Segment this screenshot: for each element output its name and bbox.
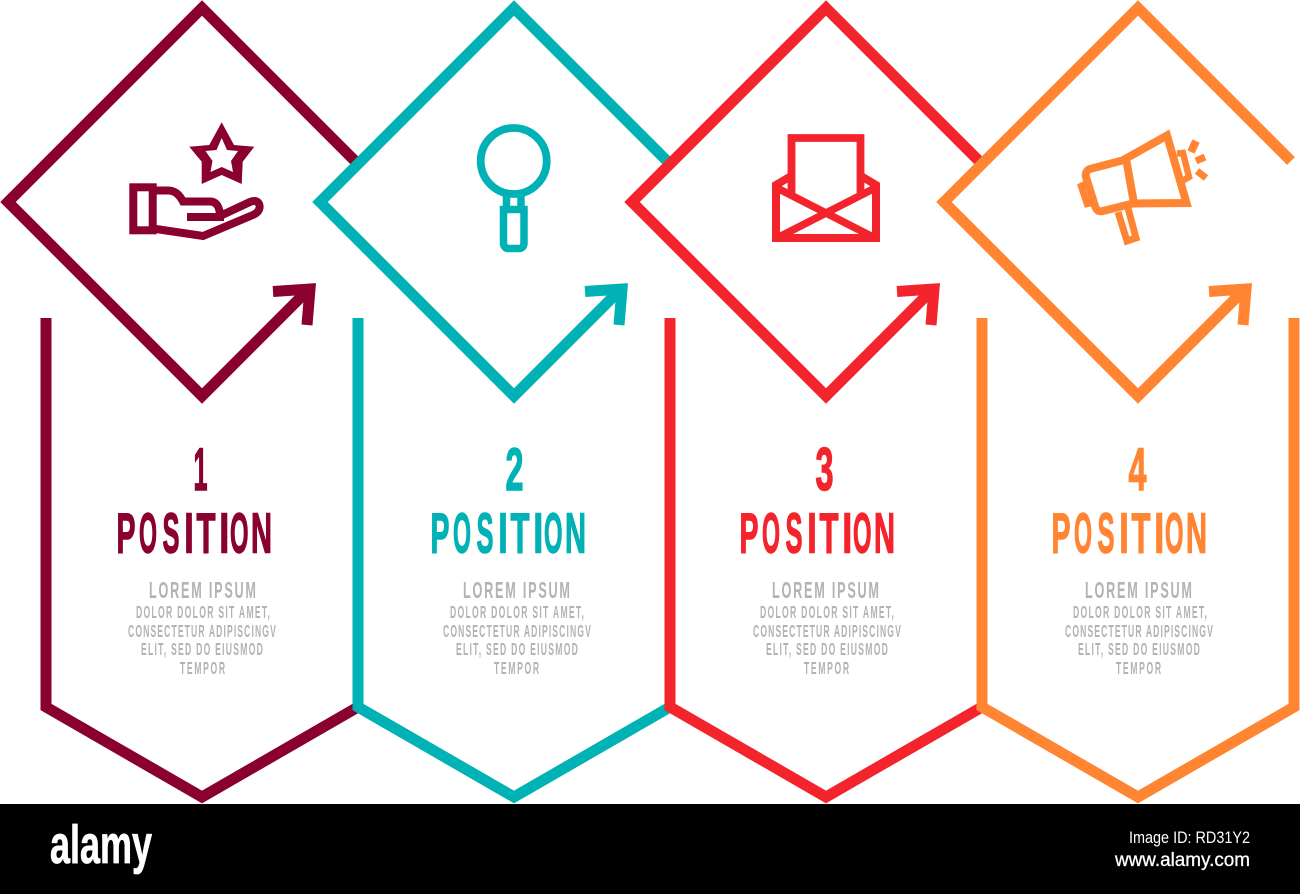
panel: position 2 <box>320 8 670 797</box>
diamond with arrow 3 <box>632 8 982 396</box>
heading: position 3: I <box>807 502 817 566</box>
heading: position 4: I <box>1119 502 1129 566</box>
footer logo: alamy <box>50 815 152 875</box>
panel: position 4 <box>944 8 1294 797</box>
image id: Image ID: RD31Y2 <box>1129 828 1250 847</box>
diamond with arrow 4 <box>944 8 1291 396</box>
heading: position 1: O <box>139 502 157 566</box>
heading: position 1: O <box>230 502 248 566</box>
panel: position 3 <box>632 8 982 797</box>
heading: position 1: S <box>162 502 180 566</box>
number 4: 4 <box>1128 436 1147 503</box>
heading: position 2: N <box>565 502 586 566</box>
text block 4: CONSECTETUR ADIPISCINGV <box>1065 620 1213 641</box>
heading: position 2: O <box>544 502 562 566</box>
icon: megaphone <box>1081 136 1206 241</box>
hexagon outline 1 <box>46 318 358 797</box>
diamond with arrow 1 <box>8 8 358 396</box>
hexagon outline 2 <box>358 318 670 797</box>
text block 4 <box>1065 577 1213 678</box>
heading: position 3: S <box>786 502 802 566</box>
text block 2: DOLOR DOLOR SIT AMET, <box>450 601 584 622</box>
text block 3: TEMPOR <box>804 657 849 678</box>
heading: position 4: O <box>1074 502 1092 566</box>
heading: position 3: P <box>740 502 758 566</box>
heading: position 1: I <box>219 502 229 566</box>
heading: position 1: N <box>251 502 272 566</box>
icon: hand with star <box>133 122 260 236</box>
heading: position 3: I <box>842 502 852 566</box>
heading: position 4: P <box>1052 502 1070 566</box>
heading: position 3: T <box>820 502 839 566</box>
heading: position 2: S <box>476 502 494 566</box>
heading: position 2: O <box>453 502 471 566</box>
heading: position 3: N <box>874 502 895 566</box>
number 2: 2 <box>506 436 524 503</box>
panel: position 1 <box>8 8 358 797</box>
text block 3: LOREM IPSUM <box>772 577 879 603</box>
heading: position 2: P <box>430 502 450 566</box>
heading: position 1: T <box>196 502 216 566</box>
panel: position 1: 1 <box>194 436 208 503</box>
text block 2: ELIT, SED DO EIUSMOD <box>456 638 578 659</box>
footer bar <box>0 804 1300 894</box>
number 3: 3 <box>816 436 834 503</box>
text block 4: LOREM IPSUM <box>1085 577 1192 603</box>
text block 4: TEMPOR <box>1116 657 1161 678</box>
text block 1: DOLOR DOLOR SIT AMET, <box>136 601 270 622</box>
text block 1: TEMPOR <box>180 657 225 678</box>
heading: position 1: P <box>116 502 136 566</box>
hexagon outline 4 <box>982 318 1294 797</box>
text block 2: CONSECTETUR ADIPISCINGV <box>443 620 591 641</box>
text block 3 <box>753 577 901 678</box>
text block 1: CONSECTETUR ADIPISCINGV <box>128 620 276 641</box>
text block 1: LOREM IPSUM <box>149 577 256 603</box>
heading: position 4: O <box>1165 502 1184 566</box>
text block 2 <box>443 577 591 678</box>
website: www.alamy.com <box>1114 850 1250 871</box>
heading: position 1: I <box>184 502 194 566</box>
hexagon outline 3 <box>670 318 982 797</box>
text block 2: TEMPOR <box>494 657 539 678</box>
heading: position 3: O <box>762 502 780 566</box>
heading: position 4: I <box>1154 502 1164 566</box>
heading: position 2: I <box>498 502 508 566</box>
text block 1: ELIT, SED DO EIUSMOD <box>141 638 263 659</box>
heading: position 4: N <box>1186 502 1207 566</box>
heading: position 4: T <box>1132 502 1151 566</box>
heading: position 2: I <box>533 502 543 566</box>
heading: position 3: O <box>853 502 872 566</box>
heading: position 2: T <box>510 502 530 566</box>
icon: magnifier <box>481 128 547 248</box>
text block 3: ELIT, SED DO EIUSMOD <box>766 638 888 659</box>
text block 4: DOLOR DOLOR SIT AMET, <box>1073 601 1207 622</box>
text block 1 <box>128 577 276 678</box>
text block 3: CONSECTETUR ADIPISCINGV <box>753 620 901 641</box>
text block 2: LOREM IPSUM <box>463 577 570 603</box>
text block 3: DOLOR DOLOR SIT AMET, <box>760 601 894 622</box>
diamond with arrow 2 <box>320 8 670 396</box>
heading: position 4: S <box>1098 502 1114 566</box>
text block 4: ELIT, SED DO EIUSMOD <box>1078 638 1200 659</box>
icon: open envelope <box>775 138 877 238</box>
